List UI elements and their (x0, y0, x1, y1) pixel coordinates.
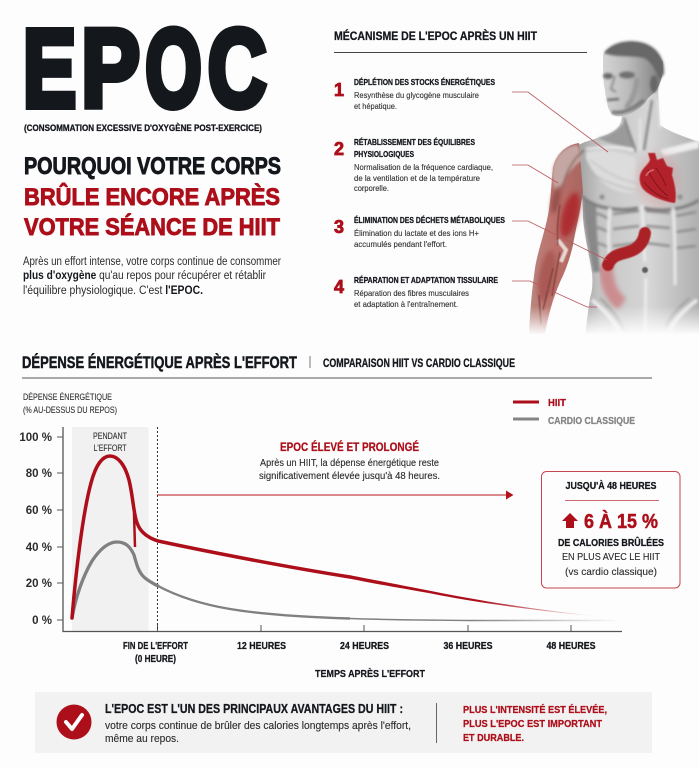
title: EPOC: C (208, 8, 267, 130)
y-axis title: DÉPENSE ÉNERGÉTIQUE (23, 392, 112, 403)
banner takeaway: ET DURABLE. (463, 732, 524, 744)
intro text: Après un effort intense, votre corps continue de consommer (23, 256, 281, 268)
step 2: 2 (334, 139, 344, 159)
y-axis title (23, 392, 117, 416)
legend: HIIT (548, 397, 567, 409)
effort period band (72, 427, 148, 631)
headline (24, 153, 281, 241)
headline: VOTRE SÉANCE DE HIIT (24, 213, 280, 241)
mechanism heading: MÉCANISME DE L'EPOC APRÈS UN HIIT (334, 28, 538, 43)
abs (586, 205, 697, 335)
effort period label: L'EFFORT (94, 443, 127, 453)
deltoid shading (553, 145, 582, 192)
legend: CARDIO CLASSIQUE (548, 415, 635, 427)
intro text: l'équilibre physiologique. C'est l'EPOC. (23, 285, 203, 297)
callout: 6 to 15 percent: EN PLUS AVEC LE HIIT (562, 551, 661, 563)
intro text (23, 256, 281, 297)
bottom fade (520, 306, 699, 342)
EPOC annotation: Après un HIIT, la dépense énergétique reste (260, 458, 439, 469)
step 1: Resynthèse du glycogène musculaire (354, 90, 479, 100)
bottom banner (35, 692, 652, 753)
y-axis labels (19, 432, 52, 627)
effort period label (93, 431, 127, 453)
pectoral highlight (586, 150, 636, 193)
step 3: Élimination du lactate et des ions H+ (354, 228, 479, 238)
arrow: EPOC duration (157, 490, 514, 500)
title: EPOC: E (23, 8, 76, 130)
neck and torso (576, 88, 699, 342)
abdominal red band (608, 233, 645, 265)
y-axis labels: 60 % (26, 505, 52, 517)
step 2: Normalisation de la fréquence cardiaque, (354, 162, 493, 172)
leader lines from steps to body (512, 92, 608, 307)
ear (650, 76, 658, 92)
illustration: anatomical torso (520, 41, 699, 342)
banner message: même au repos. (105, 733, 179, 745)
step 2 (334, 137, 493, 193)
step 2: RÉTABLISSEMENT DES ÉQUILIBRES (354, 137, 475, 147)
banner takeaway: PLUS L'EPOC EST IMPORTANT (463, 718, 603, 730)
step 2: de la ventilation et de la température (354, 173, 480, 183)
subtitle: definition of EPOC: (CONSOMMATION EXCESSIVE D'OXYGÈNE POST-EXERCICE) (24, 123, 262, 134)
heart (637, 153, 679, 207)
head (603, 42, 663, 116)
callout: 6 to 15 percent: (vs cardio classique) (565, 566, 657, 578)
axes (57, 427, 622, 632)
x-axis labels (123, 640, 596, 680)
step 4: Réparation des fibres musculaires (354, 288, 469, 298)
intro text: plus d'oxygène qu'au repos pour récupérer et rétablir (23, 270, 266, 282)
step 3: 3 (334, 217, 344, 237)
chart heading: COMPARAISON HIIT VS CARDIO CLASSIQUE (323, 358, 515, 370)
effort end marker (156, 427, 158, 631)
title: EPOC: O (145, 8, 202, 130)
step 1: 1 (334, 80, 344, 100)
arm (529, 143, 583, 334)
step 3: accumulés pendant l'effort. (354, 239, 447, 249)
callout: 6 to 15 percent: JUSQU'À 48 HEURES (566, 479, 657, 492)
nipples (600, 194, 604, 200)
step 1: DÉPLÉTION DES STOCKS ÉNERGÉTIQUES (354, 77, 495, 87)
headline: BRÛLE ENCORE APRÈS (24, 183, 280, 211)
step 4: 4 (334, 277, 344, 297)
step 3 (334, 215, 505, 249)
chart heading: DÉPENSE ÉNERGÉTIQUE APRÈS L'EFFORT (22, 353, 297, 372)
y-axis labels: 80 % (26, 468, 52, 480)
x-axis labels: 24 HEURES (340, 640, 389, 652)
y-axis title: (% AU-DESSUS DU REPOS) (23, 405, 117, 416)
banner takeaway: PLUS L'INTENSITÉ EST ÉLEVÉE, (463, 703, 607, 716)
x-axis labels: (0 HEURE) (135, 653, 176, 665)
HIIT curve (72, 456, 605, 618)
lower abdominal glow (606, 266, 622, 304)
banner message (105, 702, 411, 745)
step 2: corporelle. (354, 183, 389, 193)
x-axis labels: 48 HEURES (546, 640, 596, 652)
x-axis labels: FIN DE L'EFFORT (123, 640, 188, 652)
banner message: L'EPOC EST L'UN DES PRINCIPAUX AVANTAGES DU HIIT : (105, 702, 403, 716)
title: EPOC (23, 8, 267, 130)
y-axis labels: 40 % (26, 542, 52, 554)
step 3: ÉLIMINATION DES DÉCHETS MÉTABOLIQUES (354, 215, 505, 225)
icon: check mark (56, 704, 92, 740)
y-axis labels: 100 % (19, 432, 52, 444)
side shadow (583, 200, 600, 272)
callout: 6 to 15 percent (542, 472, 680, 588)
step 1: et hépatique. (354, 101, 397, 111)
effort period label: PENDANT (93, 431, 127, 441)
y-axis labels: 0 % (32, 615, 52, 627)
arm muscles (535, 185, 584, 303)
step 2: PHYSIOLOGIQUES (354, 149, 414, 159)
icon: up arrow (562, 513, 578, 528)
headline: POURQUOI VOTRE CORPS (24, 153, 281, 180)
y-axis labels: 20 % (26, 578, 52, 590)
callout: 6 to 15 percent: 6 À 15 % (584, 510, 658, 533)
step 1 (334, 77, 495, 111)
banner message: votre corps continue de brûler des calories longtemps après l'effort, (105, 720, 411, 732)
navel (642, 267, 648, 273)
line chart (19, 427, 622, 680)
step 4 (334, 275, 498, 309)
step 4: et adaptation à l'entraînement. (354, 299, 458, 309)
x-axis labels: 36 HEURES (444, 640, 492, 652)
banner takeaway (463, 703, 607, 744)
legend (513, 397, 635, 427)
title: EPOC: P (81, 8, 140, 130)
EPOC annotation: EPOC ÉLEVÉ ET PROLONGÉ (280, 439, 419, 454)
EPOC annotation: significativement élevée jusqu'à 48 heures. (259, 471, 440, 482)
neck shading (624, 100, 652, 152)
nose shadow and mouth (611, 76, 616, 92)
callout: 6 to 15 percent: DE CALORIES BRÛLÉES (558, 536, 664, 549)
x-axis labels: 12 HEURES (237, 640, 286, 652)
step 4: RÉPARATION ET ADAPTATION TISSULAIRE (354, 275, 498, 285)
cardio curve (72, 542, 620, 620)
hair (604, 41, 664, 80)
x-axis labels: TEMPS APRÈS L'EFFORT (315, 667, 425, 680)
EPOC annotation (259, 439, 440, 482)
chart heading (22, 353, 652, 378)
eye sockets (603, 73, 613, 79)
